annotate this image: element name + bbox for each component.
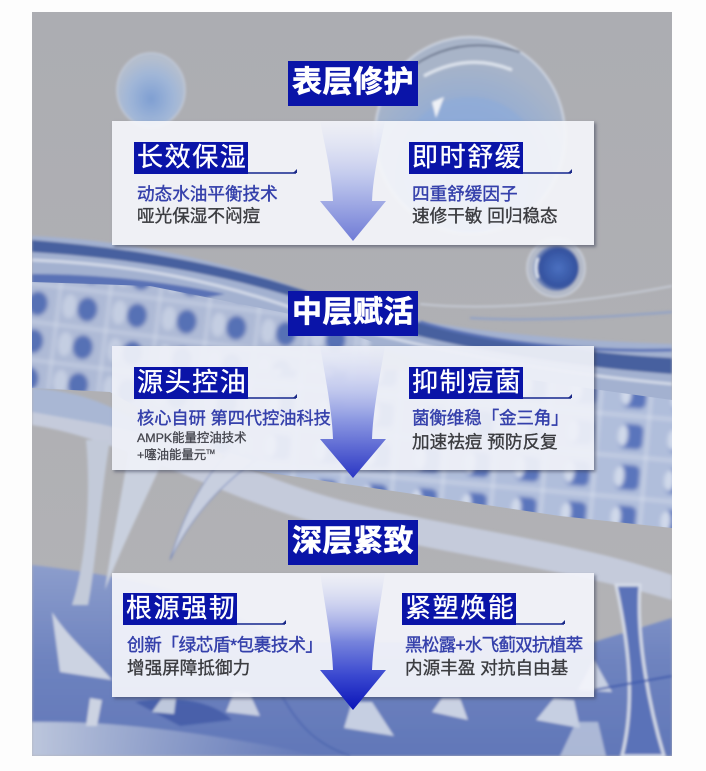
subheading: 长效保湿: 长效保湿 xyxy=(137,142,247,172)
text: 菌衡维稳「金三角」: 菌衡维稳「金三角」 xyxy=(412,408,569,428)
text: 内源丰盈 对抗自由基: 内源丰盈 对抗自由基 xyxy=(405,658,568,678)
wave band xyxy=(32,236,672,410)
text: 动态水油平衡技术: 动态水油平衡技术 xyxy=(137,184,278,204)
subheading: 源头控油: 源头控油 xyxy=(137,367,247,397)
text: 创新「绿芯盾*包裹技术」: 创新「绿芯盾*包裹技术」 xyxy=(127,635,323,655)
text: AMPK能量控油技术: AMPK能量控油技术 xyxy=(137,431,246,445)
panel: surface repair xyxy=(112,121,594,245)
title: 中层赋活: 中层赋活 xyxy=(292,296,414,329)
arrow: surface layer xyxy=(320,134,386,241)
text: 核心自研 第四代控油科技: 核心自研 第四代控油科技 xyxy=(137,408,331,428)
text: 速修干敏 回归稳态: 速修干敏 回归稳态 xyxy=(412,206,558,226)
icon: large water bubble xyxy=(375,37,565,233)
gel mat cells xyxy=(32,282,672,528)
arrow: deep layer xyxy=(320,583,386,710)
text: 加速祛痘 预防反复: 加速祛痘 预防反复 xyxy=(412,432,558,452)
text: +噻油能量元: +噻油能量元TM xyxy=(137,448,215,462)
subheading: 抑制痘菌: 抑制痘菌 xyxy=(412,367,522,397)
title: 中层赋活 xyxy=(288,291,418,336)
icon: small dark blue bubble xyxy=(527,239,585,297)
title: 深层紧致 xyxy=(288,520,418,565)
title: 表层修护 xyxy=(288,61,418,106)
subheading: 紧塑焕能: 紧塑焕能 xyxy=(405,593,515,623)
text: 增强屏障抵御力: 增强屏障抵御力 xyxy=(127,658,250,678)
title: 表层修护: 表层修护 xyxy=(292,66,414,99)
text: 四重舒缓因子: 四重舒缓因子 xyxy=(412,184,518,204)
subheading: 根源强韧: 根源强韧 xyxy=(126,593,236,623)
text: 哑光保湿不闷痘: 哑光保湿不闷痘 xyxy=(137,206,260,226)
subheading: 即时舒缓: 即时舒缓 xyxy=(412,142,522,172)
panel: deep layer xyxy=(112,573,594,697)
text: 黑松露+水飞蓟双抗植萃: 黑松露+水飞蓟双抗植萃 xyxy=(405,635,582,655)
icon: small water bubble xyxy=(117,53,185,127)
gel strands and floor xyxy=(32,388,672,756)
arrow: middle layer xyxy=(320,358,386,478)
title: 深层紧致: 深层紧致 xyxy=(292,525,414,558)
panel: middle layer xyxy=(112,346,594,470)
